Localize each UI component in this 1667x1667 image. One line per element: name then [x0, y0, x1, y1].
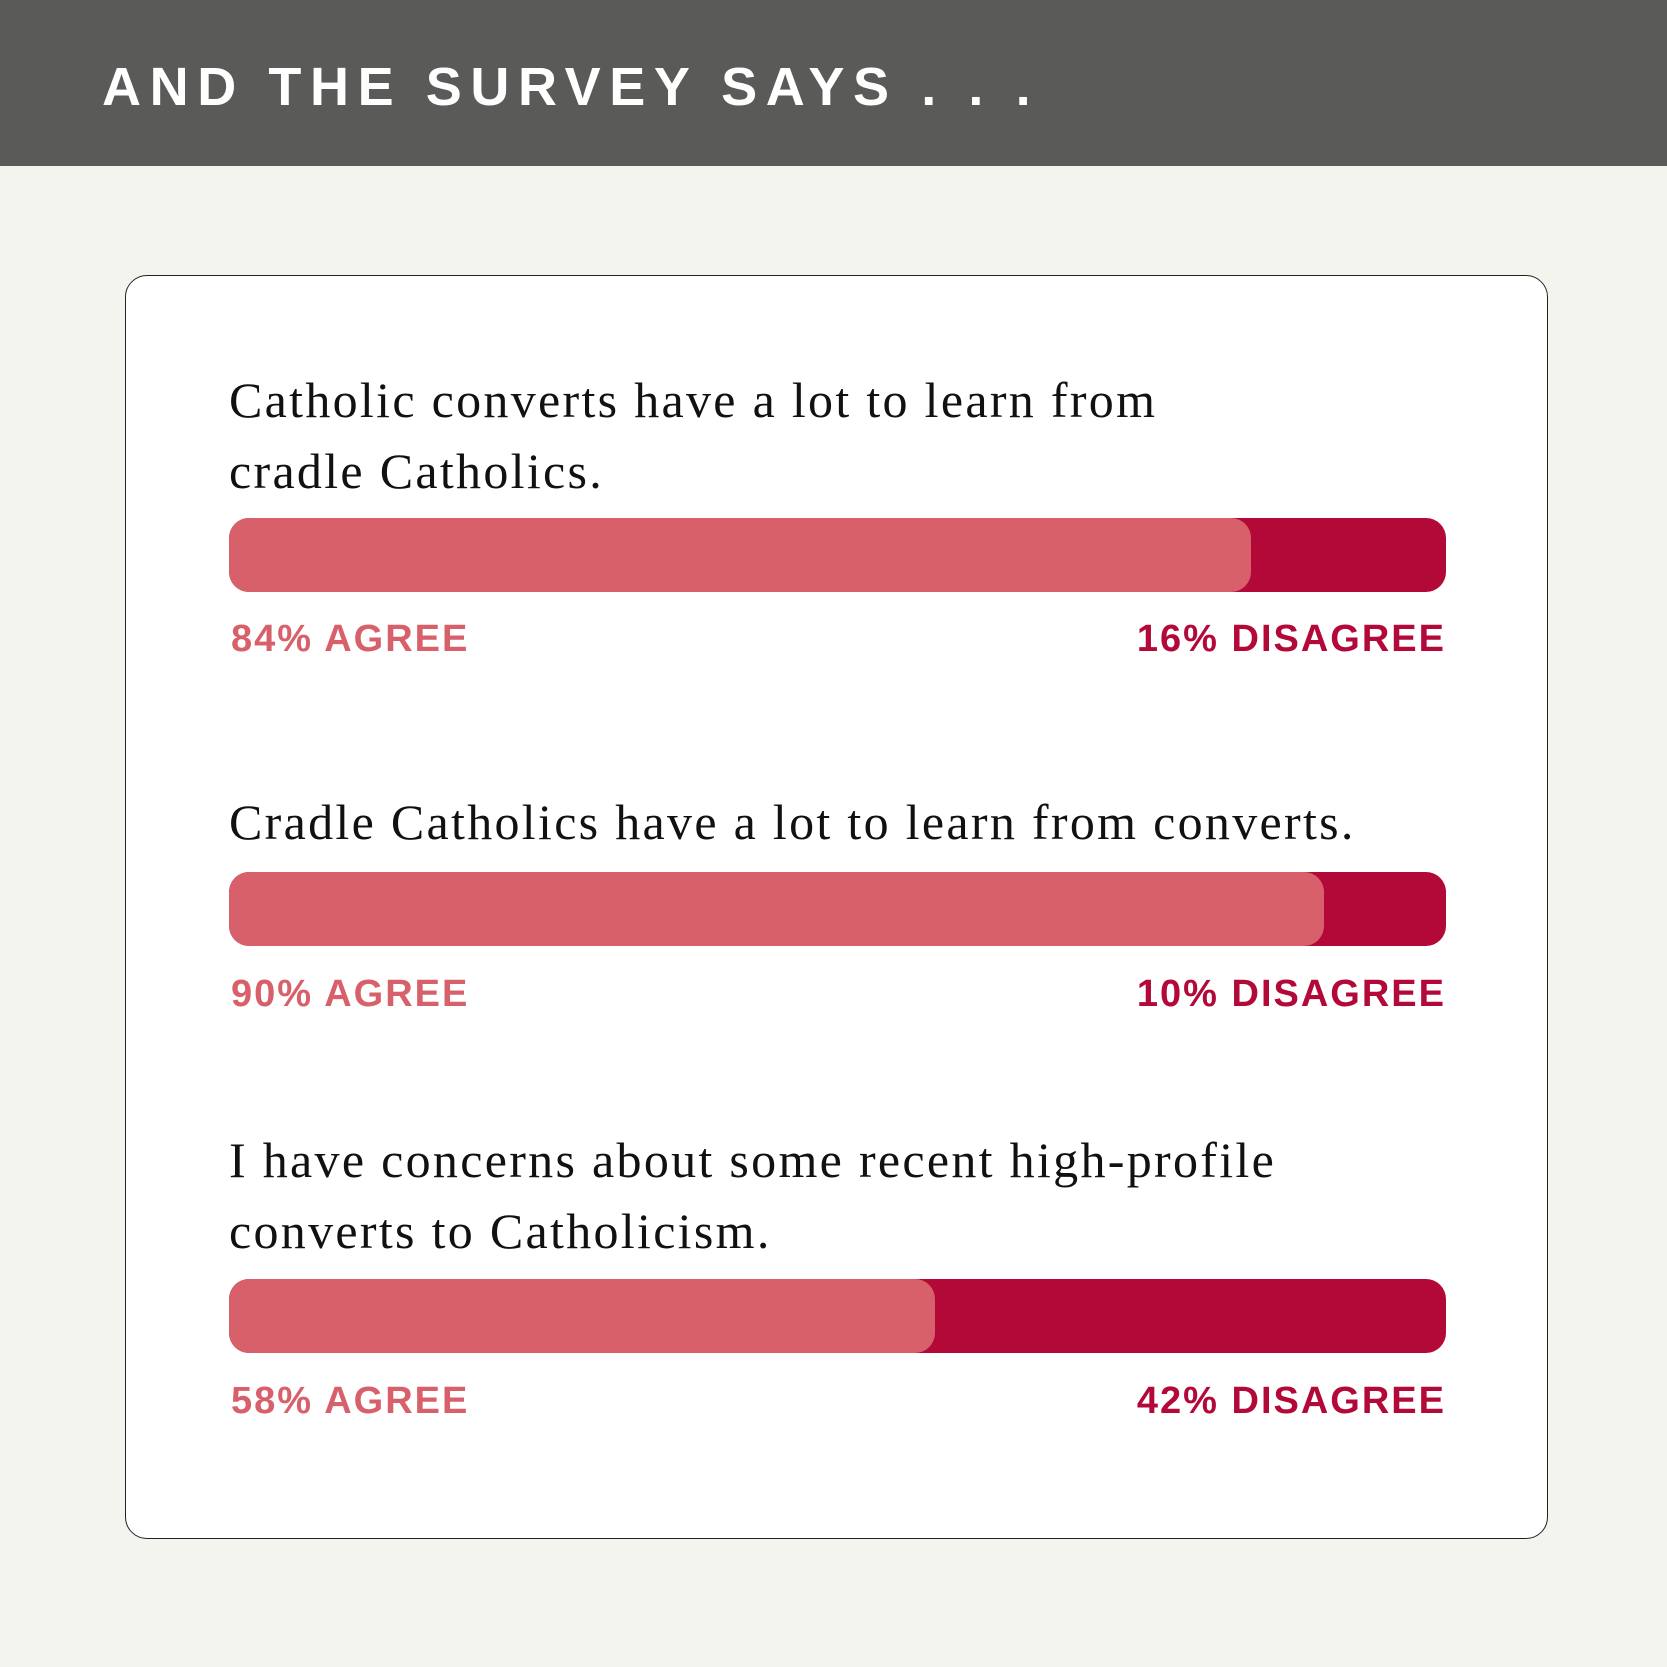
title: AND THE SURVEY SAYS . . . — [102, 57, 1039, 117]
label agree 2: 90% AGREE — [231, 973, 469, 1015]
question 3: converts to Catholicism. — [229, 1203, 772, 1259]
bar 2 — [229, 872, 1446, 946]
question 1: cradle Catholics. — [229, 443, 604, 499]
question 1: Catholic converts have a lot to learn from — [229, 372, 1157, 428]
question 2: Cradle Catholics have a lot to learn from converts. — [229, 794, 1356, 850]
question 1 — [229, 372, 1157, 499]
question 3: I have concerns about some recent high-profile — [229, 1132, 1276, 1188]
bar 1 — [229, 518, 1446, 592]
label agree 1: 84% AGREE — [231, 618, 469, 660]
bar 3 — [229, 1279, 1446, 1353]
question 3 — [229, 1132, 1276, 1259]
label disagree 3: 42% DISAGREE — [1137, 1380, 1446, 1422]
label agree 3: 58% AGREE — [231, 1380, 469, 1422]
header bar — [0, 0, 1667, 166]
label disagree 2: 10% DISAGREE — [1137, 973, 1446, 1015]
label disagree 1: 16% DISAGREE — [1137, 618, 1446, 660]
panel: survey card — [125, 275, 1548, 1539]
